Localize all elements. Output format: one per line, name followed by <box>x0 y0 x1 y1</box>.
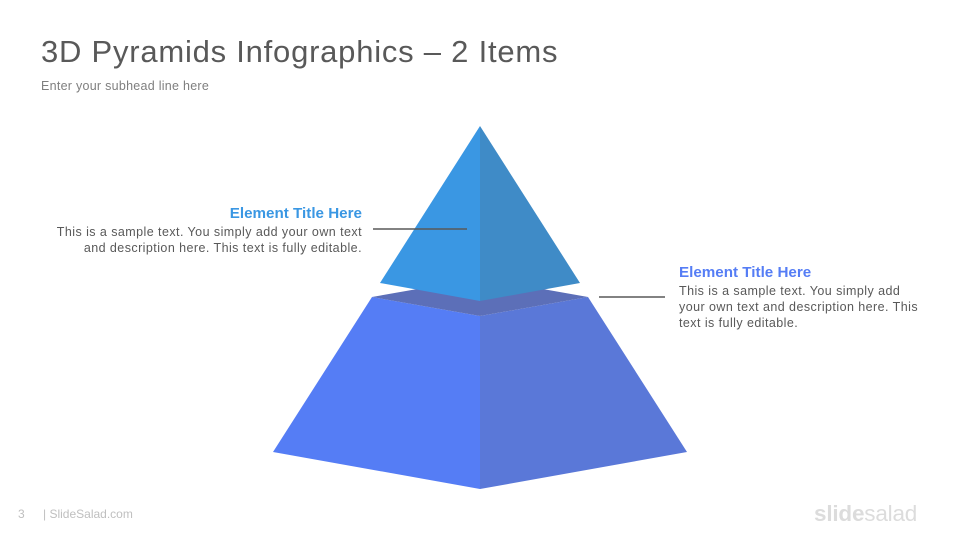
leader line: right callout <box>599 296 665 298</box>
left callout <box>57 205 362 255</box>
lower pyramid frustum <box>273 278 687 489</box>
right callout text: This is a sample text. You simply add <box>679 284 900 298</box>
right callout text: text is fully editable. <box>679 316 798 330</box>
right callout text: your own text and description here. This <box>679 300 918 314</box>
footer logo: slidesalad <box>814 501 917 526</box>
left callout heading: Element Title Here <box>230 205 362 222</box>
footer site: | SlideSalad.com <box>43 507 133 521</box>
title: 3D Pyramids Infographics – 2 Items <box>41 34 558 69</box>
right callout <box>679 264 918 330</box>
left callout text: and description here. This text is fully editable. <box>84 241 362 255</box>
right callout heading: Element Title Here <box>679 264 811 281</box>
right callout text <box>679 284 918 330</box>
left callout text <box>57 225 362 255</box>
leader line: left callout <box>373 228 467 230</box>
subhead: Enter your subhead line here <box>41 79 209 93</box>
page number: 3 <box>18 507 25 521</box>
left callout text: This is a sample text. You simply add your own text <box>57 225 362 239</box>
upper pyramid <box>380 126 580 301</box>
